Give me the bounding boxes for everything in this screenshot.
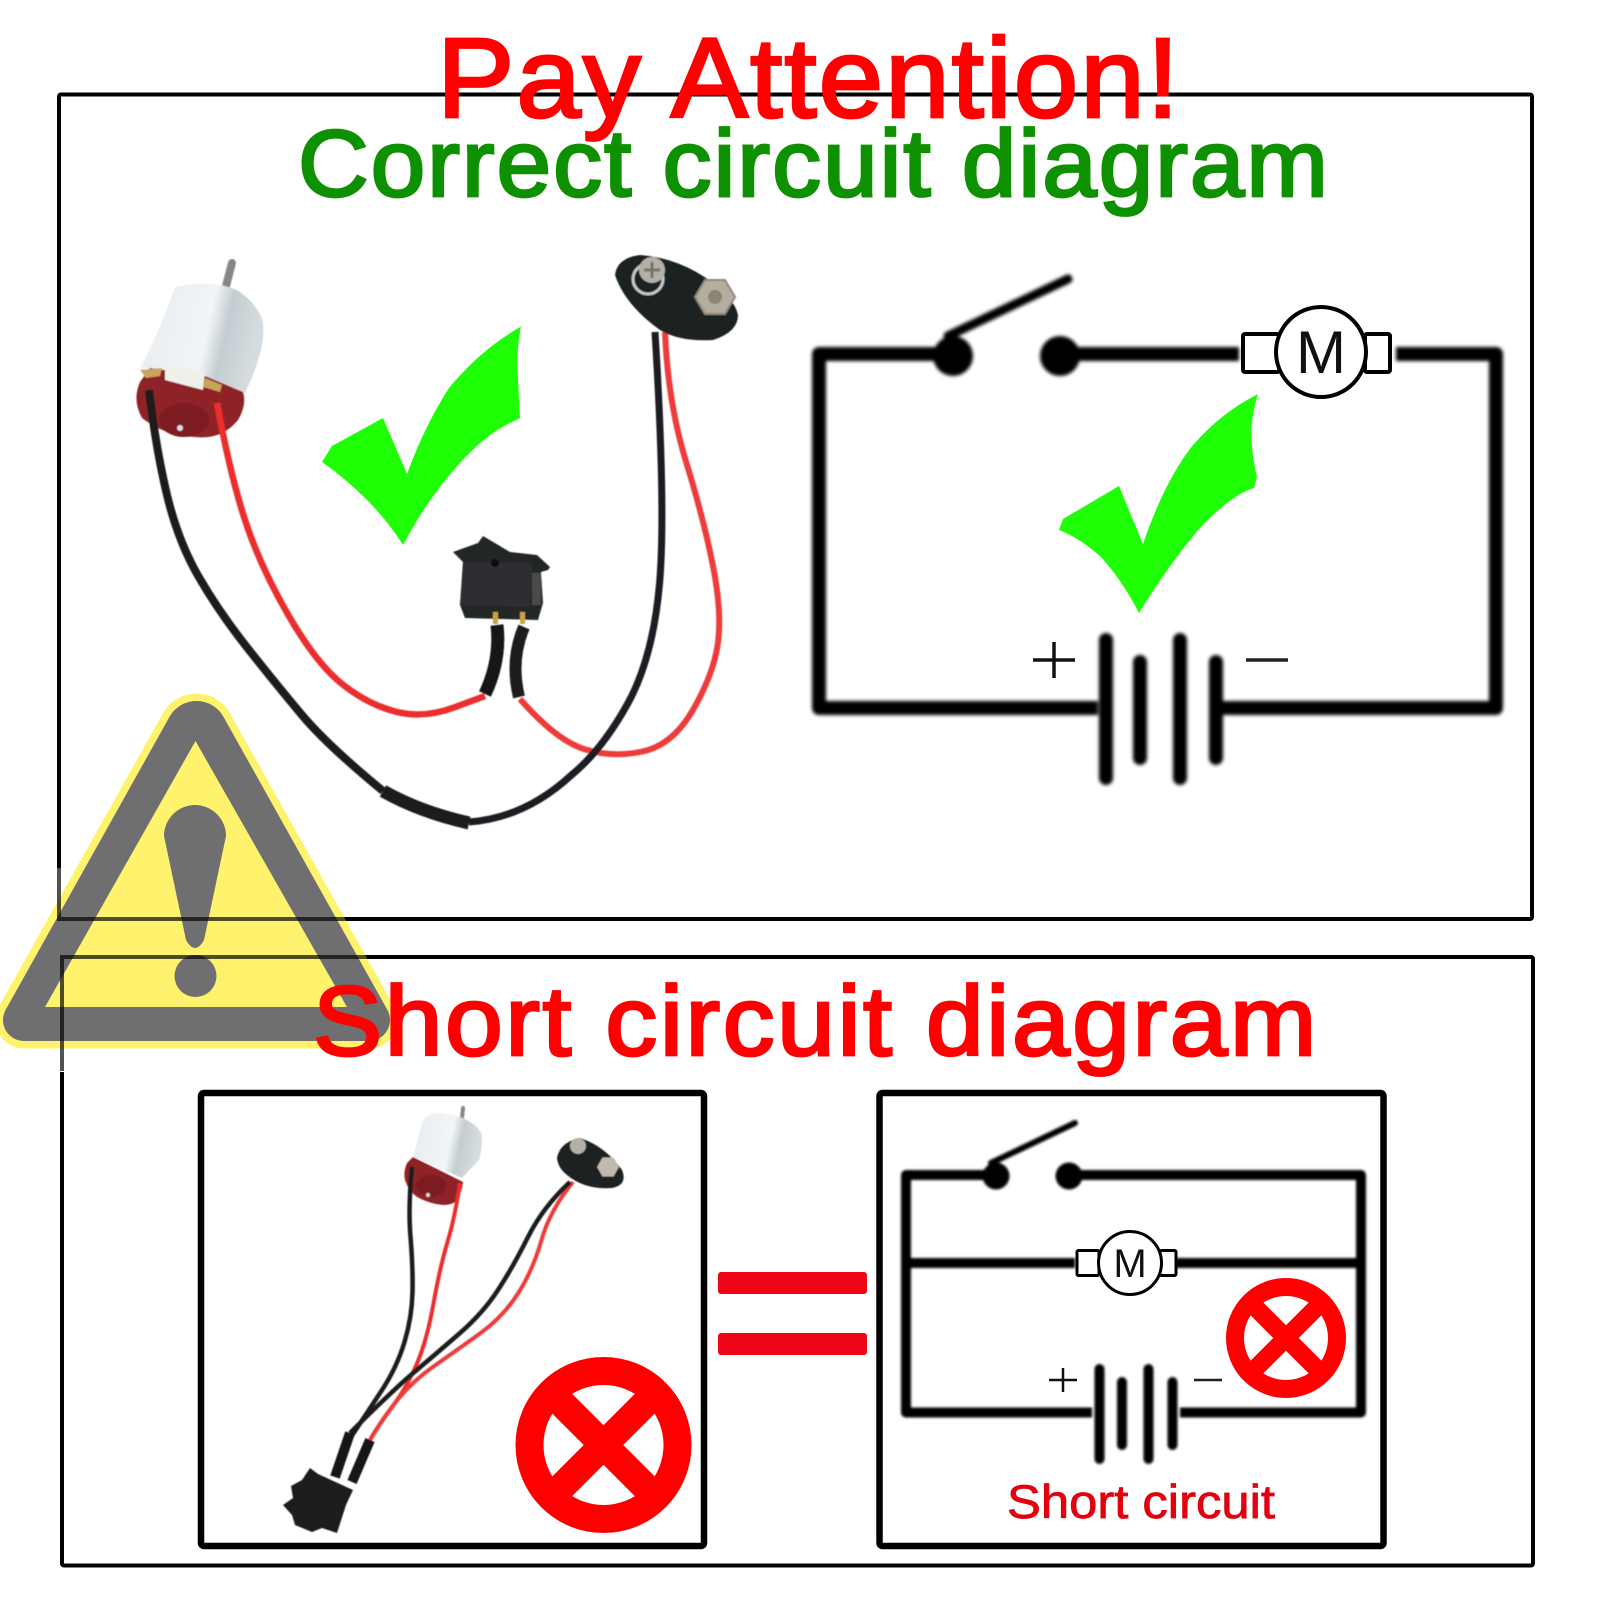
motor symbol: M (1296, 319, 1346, 386)
panel: short circuit photo box (201, 1093, 704, 1546)
switch contacts (982, 1162, 1010, 1190)
black wire to battery clip (469, 332, 662, 822)
motor red end cap (136, 368, 244, 437)
plus sign (1033, 642, 1075, 678)
icon: equals sign (718, 1272, 867, 1355)
plus sign (1049, 1368, 1077, 1392)
battery clip (615, 255, 738, 340)
red wire from motor (217, 403, 485, 714)
diagram: correct series circuit (819, 279, 1496, 778)
panel: short circuit schematic box (880, 1093, 1384, 1546)
motor can (141, 283, 263, 393)
icon: small red cross (1235, 1287, 1337, 1389)
sleeves (335, 1433, 370, 1482)
switch wire sleeves (485, 625, 498, 694)
minus sign (1194, 1379, 1222, 1381)
icon: large red cross (530, 1371, 678, 1519)
small motor (462, 1108, 463, 1118)
wires (819, 354, 1496, 708)
battery plates (1100, 1369, 1148, 1459)
switch contacts (933, 336, 973, 376)
switch arm (948, 279, 1068, 336)
small motor symbol (1077, 1232, 1176, 1294)
label: short circuit: Short circuit (1007, 1475, 1275, 1528)
small motor symbol: M (1113, 1242, 1147, 1286)
switch arm (991, 1123, 1075, 1163)
icon: green check on circuit (1059, 394, 1258, 613)
black wire from motor (149, 390, 383, 791)
outer wires (906, 1175, 1361, 1412)
heading: short circuit diagram: Short circuit diagram (313, 966, 1319, 1076)
minus sign (1246, 658, 1288, 662)
small switch (283, 1468, 353, 1533)
motor symbol (1243, 307, 1390, 397)
panel: short circuit frame (62, 957, 1533, 1566)
red wire to battery clip (520, 332, 719, 754)
icon: warning triangle (3, 701, 390, 1072)
photo: short circuit wiring (283, 1108, 624, 1533)
battery plates (1106, 640, 1180, 778)
black wires (347, 1167, 413, 1443)
panel: correct circuit frame (59, 94, 1532, 919)
heat shrink tube (383, 791, 469, 823)
icon: green check on photo (322, 326, 521, 545)
diagram: short circuit schematic (906, 1123, 1361, 1459)
rocker switch (453, 536, 550, 620)
heading: correct circuit diagram: Correct circuit diagram (298, 111, 1330, 217)
photo: wired motor switch and battery clip (136, 255, 738, 823)
middle wires (906, 1258, 1361, 1268)
title: pay attention: Pay Attention! (437, 15, 1181, 141)
small battery clip (557, 1138, 624, 1188)
red wires (370, 1183, 460, 1440)
motor shaft (226, 263, 232, 286)
